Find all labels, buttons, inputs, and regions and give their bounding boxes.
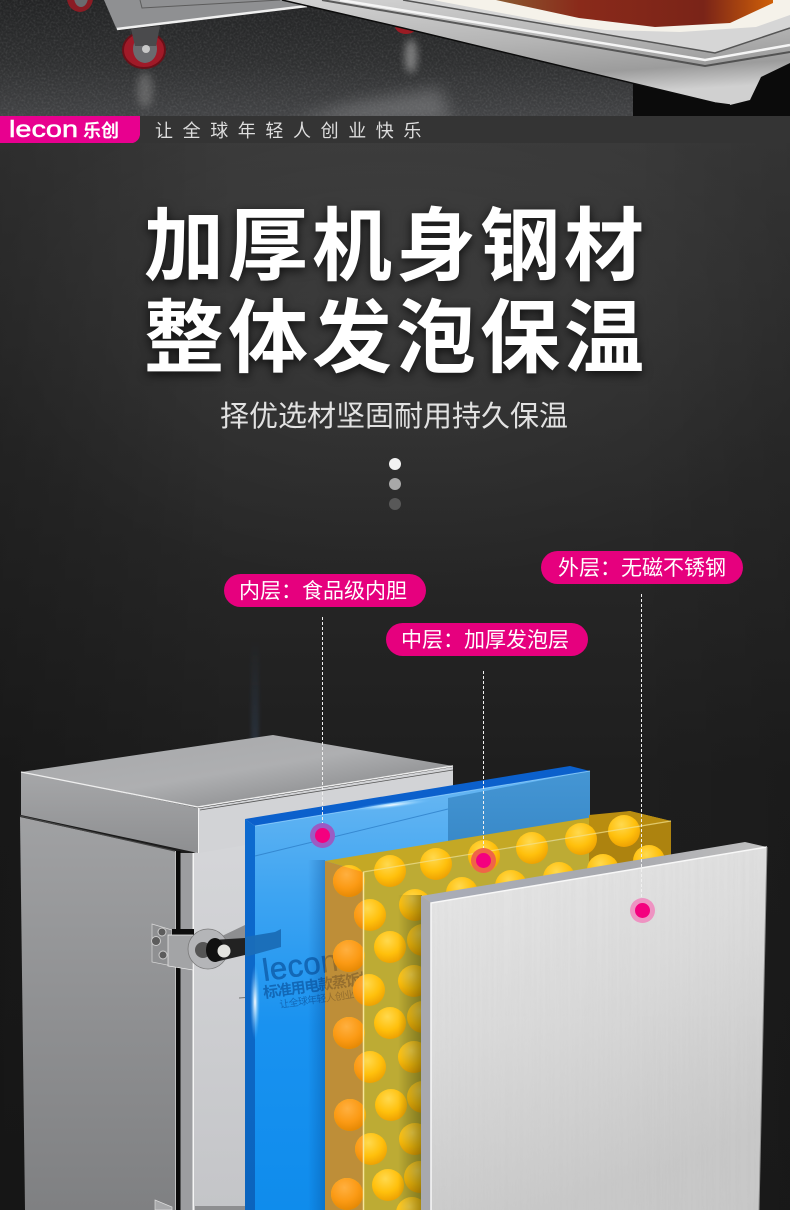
cabinet branding seen through blue bbox=[245, 929, 375, 1011]
plate top edge bbox=[421, 842, 767, 903]
label: middle layer bbox=[386, 623, 588, 656]
branding faintly visible through foam: 标准用电款蒸饭柜 bbox=[262, 970, 375, 1002]
branding faintly visible through foam: 让全球年轻人创业快乐 bbox=[279, 985, 374, 1011]
cabinet left door bbox=[20, 817, 175, 1210]
label: middle layer: 中层：加厚发泡层 bbox=[401, 629, 569, 652]
cabinet branding seen through blue: lecon bbox=[260, 943, 340, 988]
dark person at lower right bbox=[633, 60, 790, 116]
callout leader: outer layer bbox=[640, 594, 642, 899]
blue panel left edge bbox=[245, 819, 255, 1210]
floor reflections bbox=[137, 39, 452, 122]
cart wheel back right bbox=[395, 18, 417, 34]
lower hinge bbox=[155, 1200, 245, 1210]
slogan: 让全球年轻人创业快乐 bbox=[155, 121, 431, 141]
door gap and strip bbox=[176, 851, 180, 1210]
yellow foam balls bbox=[331, 815, 665, 1210]
foam front over dark bbox=[589, 821, 671, 900]
cart wheel back left bbox=[67, 0, 93, 12]
yellow foam layer panel bbox=[325, 811, 672, 1210]
cabinet right body bbox=[193, 812, 448, 1210]
label: inner layer: 内层：食品级内胆 bbox=[239, 580, 407, 603]
cabinet top face bbox=[21, 735, 453, 807]
marker: outer layer bbox=[630, 898, 655, 923]
orange foam balls on side face bbox=[331, 866, 363, 1210]
blue panel top edge bbox=[245, 766, 590, 826]
light beam above blue layer bbox=[251, 640, 259, 830]
title: 整体发泡保温 bbox=[144, 294, 648, 383]
blue inner layer panel bbox=[245, 766, 590, 1210]
cabinet branding seen through blue: 标准用电款蒸饭柜 bbox=[262, 970, 375, 1002]
foam top face bbox=[325, 811, 671, 872]
callout leader: inner layer bbox=[322, 617, 324, 826]
logo tab: lecon bbox=[9, 116, 78, 142]
steel serving tray bbox=[282, 0, 790, 105]
label: inner layer bbox=[224, 574, 426, 607]
label: outer layer: 外层：无磁不锈钢 bbox=[558, 557, 726, 580]
cap right face bbox=[199, 767, 453, 853]
marker: middle layer bbox=[471, 848, 496, 873]
logo tab bbox=[0, 116, 140, 143]
branding faintly visible through foam: lecon bbox=[260, 943, 340, 988]
cabinet branding seen through blue: 让全球年轻人创业快乐 bbox=[279, 985, 374, 1011]
top product photo: cart and tray on floor bbox=[0, 0, 790, 122]
plate front bbox=[431, 847, 767, 1210]
handle shadow bbox=[222, 925, 245, 945]
yellow layer shadow on blue bbox=[308, 860, 325, 1210]
marker: inner layer bbox=[310, 823, 335, 848]
foam left face bbox=[325, 861, 363, 1210]
label: outer layer bbox=[541, 551, 743, 584]
light flares bbox=[250, 964, 260, 1040]
white dish bbox=[433, 0, 790, 32]
subtitle: 择优选材坚固耐用持久保温 bbox=[220, 400, 568, 433]
cart front wheel bbox=[123, 26, 165, 68]
callout leader: middle layer bbox=[482, 671, 484, 850]
blue panel over dark background bbox=[448, 771, 590, 900]
floor bbox=[0, 0, 790, 116]
stainless steel outer plate bbox=[421, 842, 771, 1210]
brand header bar bbox=[0, 116, 790, 143]
title: 加厚机身钢材 bbox=[144, 202, 648, 291]
three step dots bbox=[389, 458, 401, 510]
plate shadow on foam bbox=[398, 895, 422, 1210]
steamer cabinet bbox=[20, 735, 453, 1210]
blue panel front bbox=[255, 771, 590, 1210]
cart body bbox=[104, 0, 307, 30]
foam front over blue bbox=[363, 835, 589, 1210]
plate left edge bbox=[421, 896, 431, 1210]
title bbox=[144, 202, 648, 383]
cap left face bbox=[21, 772, 198, 853]
logo tab: 乐创 bbox=[83, 121, 119, 141]
branding faintly visible through foam bbox=[325, 954, 363, 1002]
foam highlight edges bbox=[362, 872, 364, 1210]
latch hinge bbox=[152, 924, 245, 970]
food bbox=[496, 0, 773, 27]
